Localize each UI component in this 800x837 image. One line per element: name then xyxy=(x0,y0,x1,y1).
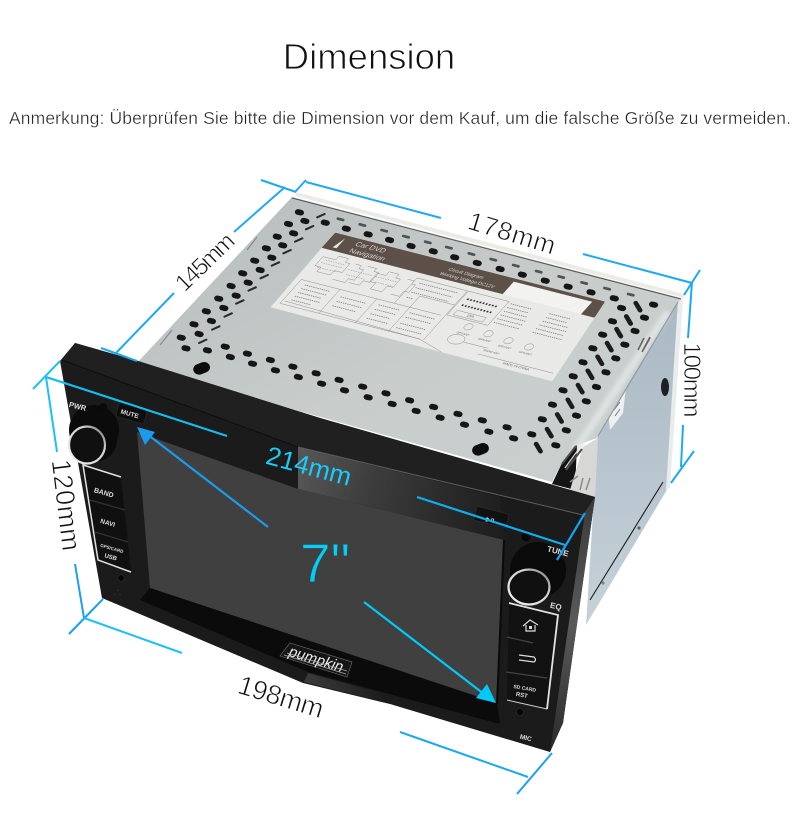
left button cluster: NAVI xyxy=(99,518,116,529)
label small print xyxy=(437,313,560,371)
dimension: 178mm width xyxy=(295,180,700,295)
dimension: 178mm width: 178mm xyxy=(465,205,559,261)
left button cluster: GPS/CARD xyxy=(100,543,125,554)
pumpkin logo: pumpkin xyxy=(286,643,345,676)
dimension: 120mm panel height: 120mm xyxy=(46,458,86,552)
right knob xyxy=(508,532,566,604)
dimension: 198mm bottom width xyxy=(84,618,552,794)
icon: return arrow xyxy=(519,655,536,662)
play pause slot: ▶II xyxy=(484,516,495,525)
label small print: RADIO ANT xyxy=(482,348,501,355)
silver bracket and lower clip xyxy=(552,438,598,497)
right button cluster: SD CARD xyxy=(513,684,537,694)
right button cluster: RST xyxy=(515,692,528,700)
right jack xyxy=(516,708,524,716)
front panel body xyxy=(60,343,595,752)
label header band: Working Voltage:DC12V xyxy=(438,272,496,290)
upper mounting clip xyxy=(638,337,650,352)
label small print: WIFI ANT xyxy=(497,344,512,350)
right button cluster xyxy=(506,603,558,709)
label header band: Navigation xyxy=(347,247,388,263)
label small print: GPS ANT xyxy=(455,331,471,337)
dimension: 145mm depth: 145mm xyxy=(170,228,241,297)
label small print: GPS ANT xyxy=(518,350,533,356)
dimension: 198mm bottom width: 198mm xyxy=(235,670,327,724)
chassis side panel xyxy=(586,298,683,625)
screen size arrow: upper left xyxy=(137,427,268,527)
label small print: MADE IN CHINA xyxy=(501,362,531,371)
TUNE label: TUNE xyxy=(546,544,570,559)
EQ label: EQ xyxy=(549,601,563,612)
label small print: GPS ANT xyxy=(477,337,492,343)
screen size label: 7" xyxy=(300,532,350,594)
chassis top plate xyxy=(135,194,684,482)
left jack and mic holes xyxy=(115,575,124,594)
MUTE button xyxy=(116,402,148,424)
screen size arrow: lower right xyxy=(364,602,496,703)
left button cluster: BAND xyxy=(93,487,114,500)
left button cluster: USB xyxy=(104,553,118,563)
PWR label: PWR xyxy=(68,400,88,413)
dimension: 145mm depth xyxy=(101,180,296,361)
label wiring diagram xyxy=(275,253,599,379)
left knob xyxy=(69,403,119,464)
subtitle note: Anmerkung: Überprüfen Sie bitte die Dimension vor dem Kauf, um die falsche Größe zu vermeiden. xyxy=(9,108,791,128)
screen xyxy=(137,432,504,724)
device illustration: car radio xyxy=(60,194,684,752)
label header band xyxy=(322,233,607,318)
dimension: 214mm panel width xyxy=(46,377,585,560)
label header band: Car DVD xyxy=(353,240,389,255)
MUTE button: MUTE xyxy=(120,409,140,421)
chassis data label xyxy=(269,233,618,380)
label header band: Circuit Diagram xyxy=(446,267,485,281)
dimension: 100mm height xyxy=(671,282,705,483)
dimension: 100mm height: 100mm xyxy=(678,342,705,418)
title: Dimension xyxy=(283,36,455,77)
chassis tab xyxy=(312,420,330,432)
dimension: 120mm panel height xyxy=(33,361,103,634)
label small print: 15A xyxy=(465,313,476,319)
left button cluster xyxy=(83,465,131,572)
play pause slot xyxy=(474,506,509,528)
icon: home xyxy=(523,620,538,631)
dimension: 214mm panel width: 214mm xyxy=(263,440,355,492)
ventilation holes xyxy=(180,212,655,451)
MIC label: MIC xyxy=(519,734,533,743)
